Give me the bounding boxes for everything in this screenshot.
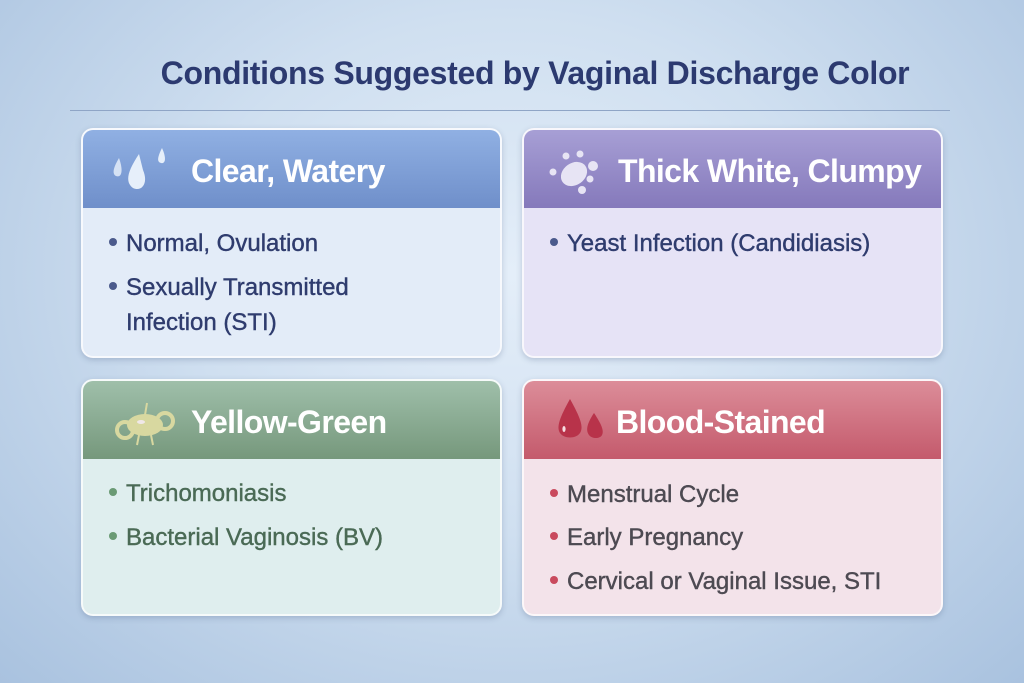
list: clear watery: Sexually Transmitted (126, 274, 349, 301)
header: blood-stained: Blood-Stained (616, 404, 825, 440)
icon: blood drops (558, 399, 603, 438)
list: blood-stained (550, 481, 881, 595)
header: thick white (524, 130, 941, 208)
icon: microbe (115, 402, 175, 446)
panel: clear watery (81, 128, 502, 358)
icon: water drops (114, 148, 165, 189)
list: blood-stained: Menstrual Cycle (567, 481, 739, 508)
list: yellow-green (109, 480, 383, 551)
header: yellow-green: Yellow-Green (191, 404, 387, 440)
title: Conditions Suggested by Vaginal Discharge Color (161, 55, 909, 91)
panel: thick white (522, 128, 943, 358)
list: clear watery: Normal, Ovulation (126, 230, 318, 257)
list: blood-stained: Early Pregnancy (567, 524, 743, 551)
header: clear watery: Clear, Watery (191, 153, 385, 189)
header: thick white: Thick White, Clumpy (618, 153, 921, 189)
panel: yellow-green (81, 379, 502, 616)
list: clear watery (109, 230, 349, 336)
panel: blood-stained (522, 379, 943, 616)
list: yellow-green: Trichomoniasis (126, 480, 286, 507)
list: thick white: Yeast Infection (Candidiasis) (567, 230, 870, 257)
header: blood-stained (524, 381, 941, 459)
list: clear watery: Infection (STI) (126, 309, 277, 336)
list: yellow-green: Bacterial Vaginosis (BV) (126, 524, 383, 551)
icon: clumps (550, 150, 598, 194)
list: blood-stained: Cervical or Vaginal Issue, STI (567, 568, 881, 595)
header: yellow-green (83, 381, 500, 459)
header: clear watery (83, 130, 500, 208)
